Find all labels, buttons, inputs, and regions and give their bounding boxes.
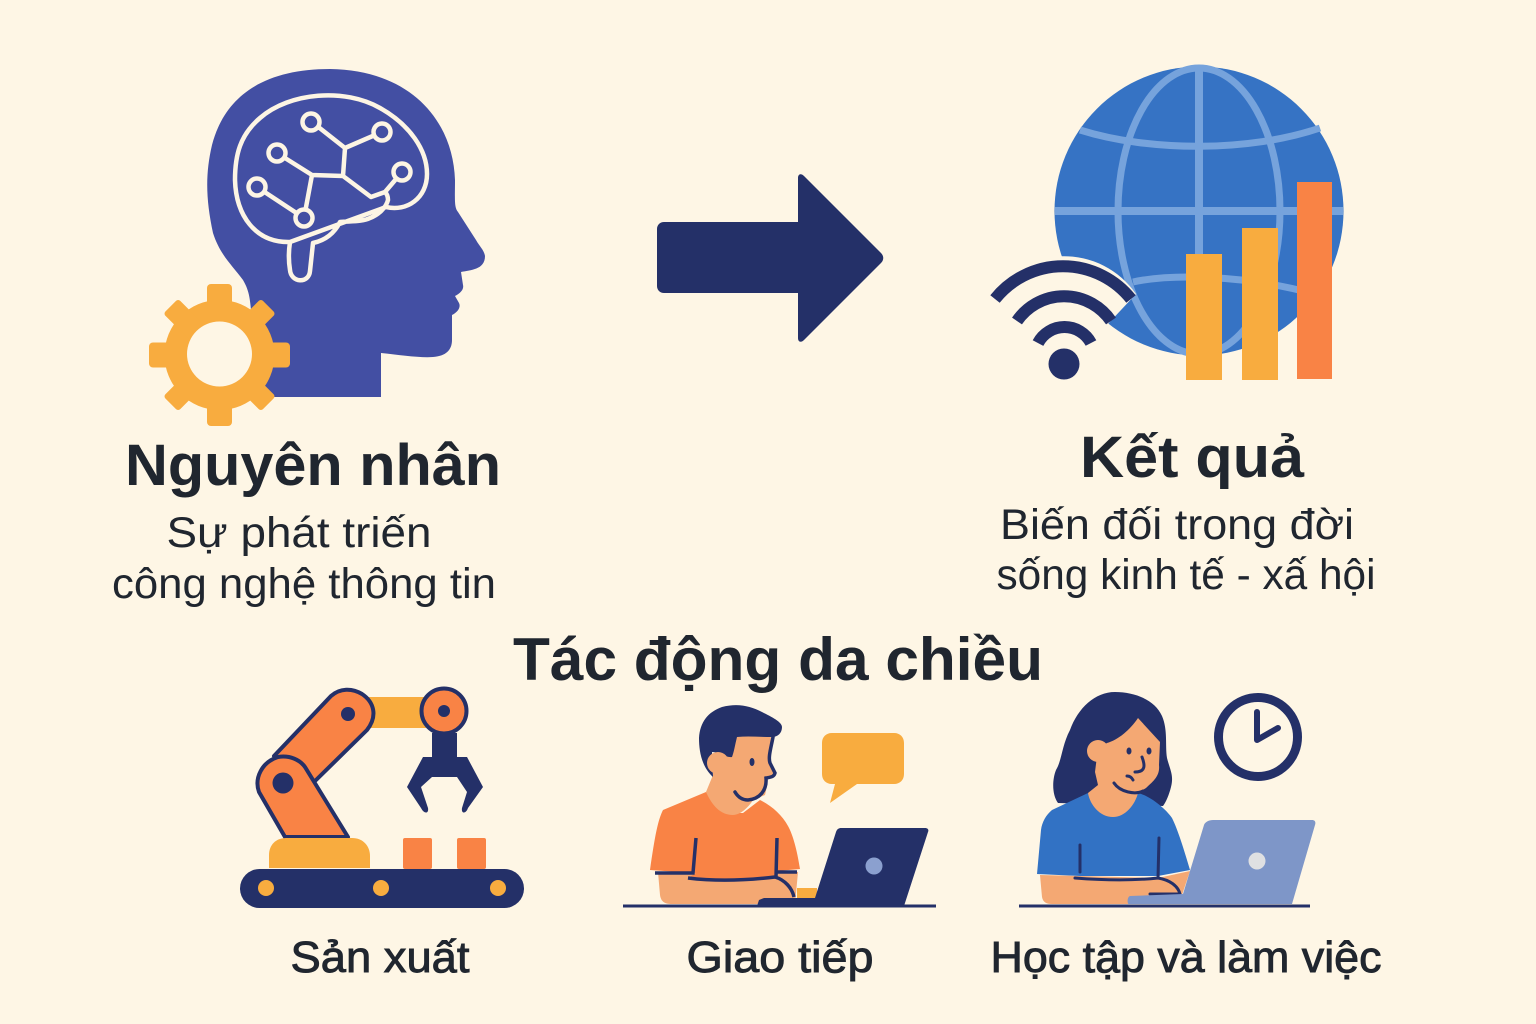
man xyxy=(650,705,817,904)
face and neck xyxy=(1088,718,1160,817)
gripper xyxy=(407,733,483,812)
shirt xyxy=(1037,793,1190,876)
icon: woman with laptop and clock xyxy=(1019,692,1315,908)
text: cause description: Sự phát triến xyxy=(166,509,432,557)
laptop xyxy=(757,828,928,906)
neck and face xyxy=(706,736,775,815)
heading: multidimensional impact: Tác động da chiều xyxy=(513,626,1043,693)
arrow xyxy=(657,174,883,342)
boxes xyxy=(403,838,486,869)
hair xyxy=(699,705,782,777)
icon: man with laptop and speech bubble xyxy=(623,705,936,908)
text: cause description: công nghệ thông tin xyxy=(112,560,496,608)
icon: clock xyxy=(1218,698,1298,776)
desk line xyxy=(1019,904,1310,908)
robot base xyxy=(269,838,370,868)
hair xyxy=(1053,692,1172,806)
icon: gear xyxy=(149,284,290,426)
robot arm xyxy=(258,688,466,837)
label: communication: Giao tiếp xyxy=(686,933,874,982)
woman xyxy=(1037,692,1190,904)
icon: robot arm on conveyor xyxy=(240,688,524,908)
icon: globe with wifi and bars xyxy=(990,66,1344,380)
text: result description: sống kinh tế - xấ hội xyxy=(996,551,1376,599)
text: result description xyxy=(996,501,1376,599)
laptop xyxy=(1128,820,1315,904)
text: result description: Biến đối trong đời xyxy=(1000,501,1354,549)
heading: cause: Nguyên nhân xyxy=(125,433,501,498)
connector xyxy=(366,697,426,728)
wifi symbol xyxy=(990,256,1136,380)
bar chart xyxy=(1186,182,1332,380)
arms xyxy=(658,872,798,904)
arm xyxy=(1040,871,1190,904)
icon: head with brain and gear xyxy=(149,69,485,426)
icon: brain outline xyxy=(235,95,427,280)
heading: result: Kết quả xyxy=(1080,425,1305,490)
label: production: Sản xuất xyxy=(290,933,470,982)
speech bubble xyxy=(822,733,904,803)
label: study and work: Học tập và làm việc xyxy=(990,933,1382,982)
shirt xyxy=(650,792,800,880)
desk line xyxy=(623,904,936,908)
globe xyxy=(1054,66,1344,356)
text: cause description xyxy=(112,509,496,608)
conveyor belt xyxy=(240,869,524,908)
